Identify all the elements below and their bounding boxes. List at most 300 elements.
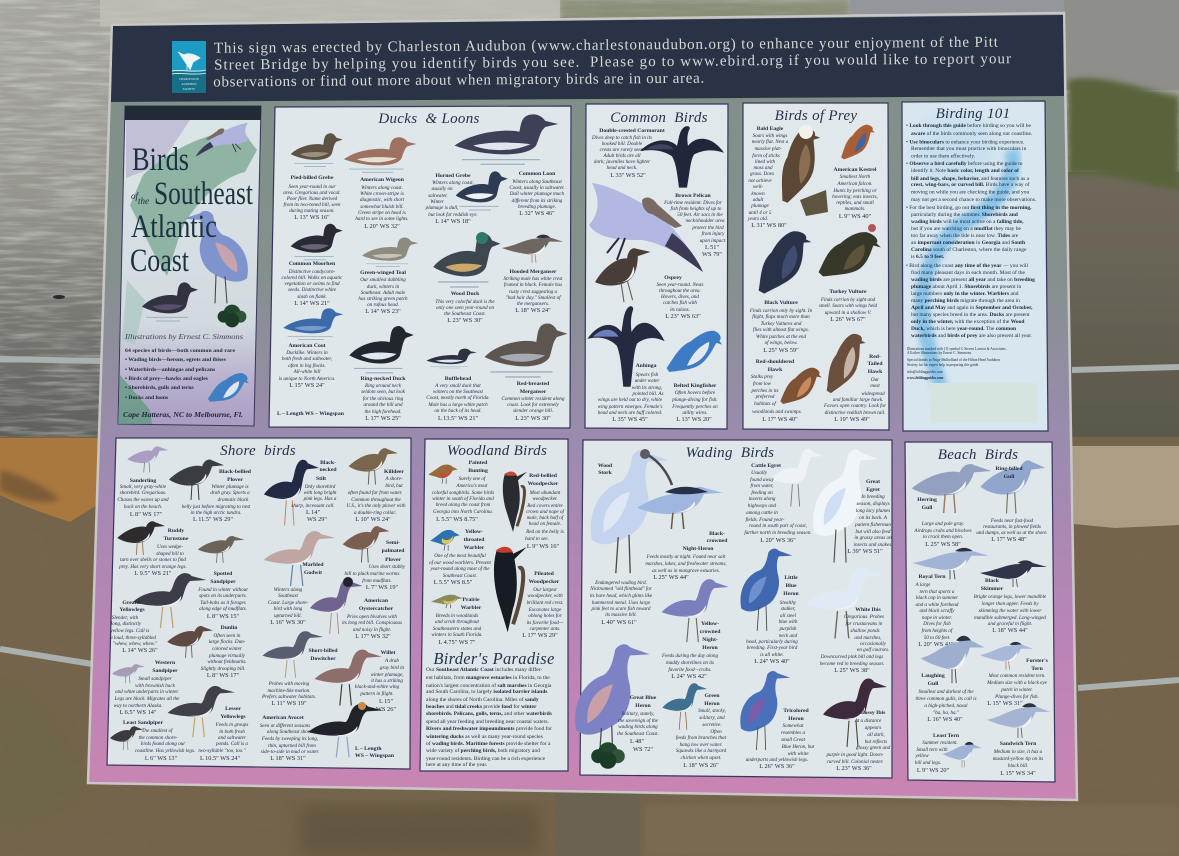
panel: beach birds: [905, 442, 1055, 782]
range caption: Cape Hatteras, NC to Melbourne, Fl.: [123, 410, 243, 419]
yellow-throated warbler: Warbler: [464, 545, 485, 551]
spotted sandpiper: spots on its underparts.: [199, 593, 247, 599]
horned grebe: Horned Grebe: [435, 173, 471, 179]
short-billed dowitcher: [261, 631, 338, 707]
tricolored heron: resembles a: [781, 730, 805, 736]
common moorhen: Common Moorhen: [289, 261, 336, 267]
birder's paradise text: beaches and tidal creeks provide food for winter: [426, 703, 537, 710]
ruddy turnstone: Uses wedge-: [157, 544, 183, 550]
killdeer: bird, but: [385, 483, 403, 489]
prairie warbler: winters in South Florida.: [431, 632, 483, 638]
sandwich tern: [987, 703, 1050, 777]
horned grebe: Winter: [430, 199, 444, 205]
white ibis: White Ibis: [855, 607, 882, 613]
legend: L – Length: [355, 746, 382, 752]
anhinga: Anhinga: [636, 363, 657, 369]
sanderling: back on the beach.: [124, 504, 162, 510]
red-tailed hawk: widespread: [861, 391, 885, 397]
royal tern: nape in winter.: [922, 615, 952, 621]
semipalmated plover: Semi-: [386, 540, 400, 546]
marbled godwit: upturned bill.: [274, 613, 302, 619]
spotted sandpiper: [197, 536, 248, 620]
royal tern: from heights of: [922, 627, 953, 634]
glossy ibis: At a distance: [854, 718, 882, 724]
birding tips: Duck, which is here year-round. The common: [911, 326, 1016, 332]
bufflehead: A very small duck that: [434, 383, 481, 389]
tricolored heron: small Great: [781, 737, 806, 743]
title text: of: [131, 191, 140, 201]
panel: common birds: [585, 104, 728, 429]
black skimmer: L 18" WS 44": [992, 627, 1028, 634]
black skimmer: Black: [985, 578, 1000, 584]
header text: This sign was erected by Charleston Audubon (www.charlestonaudubon.org) to enhance your enjoyment of the Pitt: [214, 35, 999, 57]
painted bunting: Painted: [469, 460, 488, 466]
ring-necked duck: seldom seen, but look: [361, 389, 406, 395]
wood stork: its massive bill.: [605, 612, 637, 618]
royal tern: and a white forehead: [916, 601, 959, 608]
pileated woodpecker: carpenter ants.: [530, 626, 560, 632]
short-billed dowitcher: Dowitcher: [310, 656, 336, 662]
osprey: L 23" WS 63": [665, 313, 701, 320]
herring gull: [912, 464, 992, 548]
willet: WS 26": [376, 706, 396, 713]
red-bellied woodpecker: Most abundant: [529, 490, 561, 496]
green heron: feeds from branches that: [676, 734, 727, 741]
royal tern: black cap in summer: [916, 595, 958, 601]
tricolored heron: Heron: [788, 716, 805, 722]
green-winged teal: has striking green patch: [358, 296, 408, 302]
red-breasted merganser: slender orange bill.: [513, 408, 553, 414]
american avocet: thin, upturned bill from: [268, 742, 316, 749]
brown pelican: [589, 183, 726, 272]
royal tern: and black scraffy: [919, 607, 955, 614]
laughing gull: [916, 636, 985, 723]
little blue heron: neck and: [779, 633, 798, 639]
great blue heron: Solitary, stately,: [622, 711, 654, 717]
black-crowned night-heron: Black-: [709, 531, 725, 537]
credits small print: [907, 346, 1007, 380]
birding tips: identify it. Note basic color, length and color of: [911, 167, 1019, 174]
lesser yellowlegs: Yellowlegs: [220, 714, 246, 720]
turkey vulture: upward in a shallow V.: [825, 310, 872, 316]
american coot: L 15" WS 24": [289, 382, 325, 389]
black-bellied plover: Black-bellied: [219, 469, 252, 475]
ruddy turnstone: Ruddy: [168, 528, 184, 534]
forster's tern: Tern: [1031, 666, 1044, 672]
spotted sandpiper: Tail-bobs as it forages: [200, 599, 246, 606]
turkey vulture: Finds carrion by sight and: [820, 297, 876, 303]
turkey vulture: Turkey Vulture: [829, 289, 867, 295]
red-bellied woodpecker: Red on the belly is: [525, 529, 564, 535]
birder's paradise text: here at any time of the year.: [426, 761, 488, 768]
herring gull: to crack them open.: [923, 534, 963, 540]
wood stork: Wood: [598, 463, 613, 469]
horned grebe: usually on: [431, 186, 453, 192]
american kestrel: reptiles, and small: [836, 200, 874, 206]
birding tips: • Look through this guide before birding so you will be: [906, 122, 1032, 129]
ring-billed gull: Ring-billed: [995, 466, 1023, 472]
short-billed dowitcher: L 11" WS 19": [271, 700, 307, 707]
bald eagle: plumage: [750, 203, 770, 209]
red-tailed hawk: Tailed: [868, 361, 883, 367]
pied-billed grebe: from its two-toned bill, seen: [284, 201, 341, 208]
dunlin: large flocks. Dun-: [209, 638, 246, 645]
least sandpiper: The smallest of: [142, 727, 173, 734]
header banner: [111, 15, 1064, 102]
american wigeon: White crown-stripe is: [360, 191, 404, 197]
horned grebe: but look for reddish eye.: [428, 211, 478, 218]
american kestrel: hovering; eats insects,: [832, 194, 878, 200]
great egret: season, displays: [856, 501, 890, 507]
wood stork: hammered metal. Uses large: [592, 600, 651, 606]
yellow-throated warbler: throated: [464, 537, 485, 543]
black-necked stilt: pink legs. Has a: [303, 496, 337, 502]
bald eagle: grass. Does: [750, 171, 774, 177]
willet: L 15": [379, 698, 393, 705]
marbled godwit: Winters along: [274, 587, 303, 593]
pileated woodpecker: Woodpecker: [529, 579, 560, 585]
ring-necked duck: [349, 326, 414, 422]
lesser yellowlegs: and saltwater: [218, 735, 246, 741]
bufflehead: [426, 349, 490, 422]
prairie warbler: Breeds in woodlands: [436, 613, 478, 619]
species list: • Birds of prey—hawks and eagles: [125, 376, 209, 382]
ring-billed gull: [976, 460, 1048, 543]
dunlin: without fieldmarks.: [207, 658, 247, 665]
cattle egret: insects along: [749, 496, 776, 502]
wood duck: L 23" WS 30": [447, 317, 483, 324]
american kestrel: Smallest North: [840, 174, 871, 180]
marbled godwit: Godwit: [304, 570, 322, 576]
american coot: American Coot: [288, 343, 326, 349]
american kestrel: [832, 120, 878, 220]
pileated woodpecker: L 17" WS 29": [522, 632, 558, 639]
killdeer: a double-ring collar.: [354, 510, 396, 516]
prairie warbler: Warbler: [461, 605, 482, 611]
common moorhen: L 14" WS 21": [294, 300, 330, 307]
anhinga: pointed bill. As: [632, 391, 663, 397]
laughing gull: Gull: [928, 681, 939, 687]
white ibis: Gregarious. Probes: [844, 614, 884, 620]
turkey vulture: smell. Soars with wings held: [819, 303, 878, 309]
red-tailed hawk: distinctive reddish brown tail.: [825, 410, 885, 416]
prairie warbler: and scrub throughout: [435, 619, 480, 625]
birding tips: an important consideration in Georgia and South: [911, 240, 1025, 246]
great egret: on its back. A: [859, 515, 888, 521]
tricolored heron: Tricolored: [783, 708, 810, 714]
wood stork: Endangered wading bird.: [594, 580, 647, 586]
red-shouldered hawk: perches in its: [751, 388, 778, 394]
painted bunting: Surely one of: [459, 475, 486, 482]
cattle egret: highways and: [748, 503, 777, 509]
wood duck: only one seen year-round on: [436, 305, 494, 311]
birder's paradise text: shorebirds. Pelicans, gulls, terns, and other waterbirds: [426, 711, 552, 717]
killdeer: Common throughout the: [351, 497, 402, 503]
credits small print: Special thanks to Paige Mulholland of the Hilton Head Audubon: [907, 358, 1000, 362]
black-crowned night-heron: as well as in mangrove estuaries.: [652, 568, 720, 574]
herring gull: Gull: [922, 505, 933, 511]
black-bellied plover: drab gray. Sports a: [210, 490, 250, 496]
ring-necked duck: around the bill and: [363, 402, 403, 408]
birding tips: but if you are watching on a mudflat they may be: [911, 225, 1022, 232]
belted kingfisher: plunge-diving for fish.: [671, 396, 718, 403]
common loon: Common Loon: [519, 171, 556, 177]
red-shouldered hawk: L 17" WS 40": [762, 416, 798, 423]
dunlin: [167, 625, 247, 679]
royal tern: L 20" WS 41": [918, 641, 954, 648]
common moorhen: seeds. Distinctive white: [288, 287, 337, 293]
bald eagle: until 4 or 5: [749, 210, 772, 216]
double-crested cormorant: head and neck.: [607, 165, 637, 171]
semipalmated plover: from mudflats.: [362, 577, 392, 584]
red-bellied woodpecker: head on female.: [529, 520, 561, 527]
greater yellowlegs: yellow legs. Call is: [110, 628, 149, 634]
birder's paradise text: Our Southeast Atlantic Coast includes many differ-: [426, 666, 542, 673]
birding tips: bill and legs, shape, behavior, and features such as a: [911, 175, 1030, 182]
header text: Street Bridge by helping you identify birds you see. Please go to www.ebird.org if you would like to report your: [214, 51, 1011, 73]
pied-billed grebe: L 13" WS 16": [294, 214, 330, 221]
black-bellied plover: [169, 459, 252, 523]
bald eagle: [747, 125, 828, 229]
anhinga: head and neck are buff colored.: [598, 409, 662, 416]
red-shouldered hawk: Stalks prey: [751, 374, 774, 380]
common loon: breeding plumage.: [518, 204, 556, 210]
dunlin: Dunlin: [221, 625, 238, 631]
birding tips: aware of the birds commonly seen along our coastline.: [911, 130, 1033, 137]
red-tailed hawk: Red-: [869, 354, 881, 360]
green-winged teal: Green-winged Teal: [360, 270, 406, 276]
osprey: Hovers, dives, and: [660, 294, 699, 300]
species list: 64 species of birds—both common and rare: [125, 348, 235, 354]
greater yellowlegs: "whew, whew, whew.": [113, 641, 158, 647]
white ibis: [805, 567, 889, 674]
yellow-throated warbler: [429, 529, 492, 586]
hooded merganser: Striking male has white crest: [504, 276, 563, 282]
credit: Illustrations by Ernest C. Simmons: [124, 333, 243, 341]
red-bellied woodpecker: Woodpecker: [528, 481, 559, 487]
painted bunting: breed along the coast from: [436, 501, 491, 508]
black-crowned night-heron: [637, 487, 728, 581]
birding tips: moving on while you are checking the guide, and you: [911, 190, 1029, 196]
spotted sandpiper: L 8" WS 15": [207, 613, 240, 620]
sanderling: Sanderling: [130, 478, 156, 484]
ring-necked duck: the high forehead.: [364, 408, 402, 415]
brown pelican: Full-time resident. Dives for: [663, 199, 722, 206]
glossy ibis: curved bill. Colonial nester.: [827, 759, 883, 765]
western sandpiper: L 6.5" WS 14": [120, 709, 157, 716]
black-necked stilt: Stilt: [316, 476, 326, 482]
red-tailed hawk: [823, 331, 886, 423]
glossy ibis: Glossy Ibis: [859, 710, 886, 716]
panel: birds of prey: [743, 103, 889, 430]
semipalmated plover: Uses short stubby: [369, 564, 406, 570]
icon: Charleston Audubon logo: CHARLESTON: [179, 77, 200, 81]
species list: [125, 348, 235, 401]
horned grebe: Winters along coast,: [432, 180, 474, 186]
glossy ibis: glossy green and: [856, 745, 891, 751]
american wigeon: Winters along coast.: [361, 185, 403, 191]
black-bellied plover: belly just before migrating to nest: [182, 503, 251, 510]
common loon: Dull winter plumage much: [509, 191, 565, 197]
birding tips: plumage about April 1. Shorebirds are present in: [911, 284, 1021, 290]
great egret: In breeding: [860, 494, 885, 500]
black vulture: flight, flaps much more than: [752, 313, 810, 320]
red-breasted merganser: Common winter resident along: [501, 396, 565, 402]
tricolored heron: Blue Heron, but: [782, 744, 815, 750]
green-winged teal: Southeast. Adult male: [361, 290, 406, 296]
cattle egret: found away: [750, 476, 775, 483]
title text: Coast: [130, 243, 189, 279]
little blue heron: purplish: [779, 626, 797, 632]
anhinga: L 35" WS 45": [612, 416, 648, 423]
birding tips: large numbers only in the winter. Warblers and: [911, 291, 1019, 297]
pied-billed grebe: during mating season.: [289, 208, 335, 214]
black vulture: [749, 226, 813, 354]
common loon: L 32" WS 46": [519, 210, 555, 217]
birder's paradise text: wide variety of perching birds, both migratory and: [426, 747, 540, 754]
willet: winter plumage,: [370, 672, 404, 678]
black-bellied plover: L 11.5" WS 29": [193, 516, 233, 523]
birding tips: find many pleasant days in each month. Most of the: [911, 269, 1026, 276]
railings: [0, 359, 1179, 688]
bald eagle: well-: [753, 184, 763, 190]
turkey vulture: L 26" WS 67": [830, 316, 866, 323]
red-breasted merganser: [484, 323, 567, 422]
red-shouldered hawk: from low: [753, 380, 772, 387]
wood stork: L 40" WS 61": [601, 619, 637, 626]
black vulture: Turkey Vultures and: [761, 321, 802, 327]
green-winged teal: duck, winters in: [367, 284, 400, 290]
icon: Charleston Audubon logo: [172, 41, 206, 93]
spotted sandpiper: Found in winter without: [197, 587, 248, 593]
western sandpiper: way to northern Alaska.: [114, 703, 162, 709]
birder's paradise text: Rivers and freshwater impoundments provide food for: [426, 725, 552, 732]
cattle egret: from water,: [750, 482, 774, 489]
common loon: [455, 114, 565, 217]
birding tips: waterbirds and birds of prey are also present all year.: [911, 333, 1033, 339]
painted bunting: [428, 460, 494, 523]
legend: WS – Wingspan: [355, 753, 395, 759]
birder's paradise text: wintering ducks as well as many year-round species: [426, 734, 543, 740]
pileated woodpecker: brilliant red crest.: [527, 600, 563, 606]
birding tips: [906, 122, 1037, 339]
pileated woodpecker: oblong holes for: [528, 612, 562, 619]
icon: moorhen: [142, 282, 198, 321]
double-crested cormorant: hooked bill. Double: [602, 141, 643, 147]
white ibis: and marshes,: [854, 635, 882, 641]
common loon: Winters along Southeast: [512, 179, 562, 185]
belted kingfisher: [665, 320, 726, 423]
cattle egret: fields. Found year-: [746, 516, 785, 523]
laughing gull: three common gulls, its call is: [916, 696, 976, 702]
red-breasted merganser: L 23" WS 30": [515, 415, 551, 422]
wood duck: Wood Duck: [451, 291, 480, 297]
laughing gull: "ha, ha, ha.": [933, 710, 960, 716]
birder's paradise text: and South Carolina, to largely isolated barrier islands: [426, 689, 547, 695]
great egret: long lacy plumes: [856, 508, 890, 514]
willet: A drab: [384, 658, 399, 664]
green heron: hang low over water.: [680, 742, 722, 748]
birder's paradise text: [426, 666, 552, 768]
great egret: [813, 450, 892, 563]
double-crested cormorant: Adult birds are all: [602, 153, 641, 159]
belted kingfisher: Frequently perches on: [671, 404, 718, 410]
anhinga: wing pattern emerges. Female's: [598, 404, 662, 410]
semipalmated plover: palmated: [382, 548, 405, 554]
brown pelican: WS 79": [702, 251, 722, 258]
brown pelican: protect the bird: [691, 225, 724, 231]
common moorhen: vegetation or swims to find: [284, 280, 340, 287]
american kestrel: American falcon.: [836, 180, 873, 187]
heading: Birding 101: [936, 106, 1010, 122]
black vulture: L 25" WS 59": [763, 347, 799, 354]
black-bellied plover: dramatic black: [218, 497, 249, 503]
birder's paradise text: nation's largest concentration of salt marshes in Georgia: [426, 682, 552, 689]
american oystercatcher: and noisy in flight.: [353, 626, 391, 633]
heading: Shore birds: [220, 443, 296, 459]
royal tern: Dives for fish: [922, 620, 951, 627]
willet: gray bird in: [380, 665, 405, 671]
black vulture: White patches at the end: [756, 334, 806, 340]
species list: • Wading birds—herons, egrets and ibises: [125, 357, 227, 363]
white ibis: for crustaceans in: [846, 620, 883, 627]
forster's tern: Medium size with a black eye: [986, 680, 1048, 686]
herring gull: Airdrops crabs and bivalves: [913, 528, 972, 534]
royal tern: Royal Tern: [918, 574, 946, 580]
american oystercatcher: L 17" WS 32": [355, 633, 391, 640]
bald eagle: years old.: [747, 216, 768, 222]
dunlin: plumage virtually: [208, 653, 246, 659]
yellow-crowned night-heron: favorite food—crabs.: [668, 666, 712, 673]
hooded merganser: framed in black. Female has: [504, 281, 562, 288]
greater yellowlegs: [110, 573, 206, 654]
black-necked stilt: Only shorebird: [305, 484, 336, 490]
red-bellied woodpecker: hard to see.: [525, 536, 549, 542]
double-crested cormorant: L 33" WS 52": [610, 172, 646, 179]
black vulture: Finds carrion only by sight. In: [749, 308, 813, 314]
great egret: Egret: [866, 487, 880, 493]
osprey: Osprey: [664, 275, 682, 281]
willet: black-and-white wing: [355, 684, 400, 690]
black skimmer: Skimmer: [981, 586, 1004, 592]
red-bellied woodpecker: crown and nape of: [526, 508, 565, 515]
semipalmated plover: L 7" WS 19": [366, 584, 399, 591]
red-shouldered hawk: [751, 359, 824, 423]
yellow-crowned night-heron: muddy shorelines on its: [666, 660, 714, 666]
credits small print: www.foldingguides.com: [907, 376, 943, 380]
ruddy turnstone: prey. Has very short orange legs.: [118, 564, 187, 570]
great egret: L 39" WS 51": [847, 548, 883, 555]
great blue heron: L 48": [630, 738, 644, 745]
painted bunting: Bunting: [468, 468, 488, 474]
pied-billed grebe: area. Gregarious and vocal.: [283, 190, 341, 196]
black-necked stilt: [264, 460, 337, 526]
birder's paradise heading: Birder's Paradise: [433, 649, 555, 668]
legend: [355, 746, 395, 759]
lesser yellowlegs: L 10.5" WS 24": [200, 755, 240, 762]
cattle egret: among cattle in: [746, 510, 778, 516]
american wigeon: Green stripe on head is: [358, 210, 406, 216]
title text: Southeast: [154, 176, 253, 212]
red-tailed hawk: most: [870, 383, 880, 389]
american kestrel: L 9" WS 40": [839, 213, 872, 220]
belted kingfisher: L 13" WS 20": [676, 416, 712, 423]
tricolored heron: [740, 671, 815, 770]
killdeer: often found far from water.: [348, 489, 402, 496]
hooded merganser: the mergansers.: [517, 301, 549, 307]
red-shouldered hawk: preferred: [755, 393, 775, 400]
ring-billed gull: and dumps, as well as at the shore.: [976, 530, 1048, 536]
